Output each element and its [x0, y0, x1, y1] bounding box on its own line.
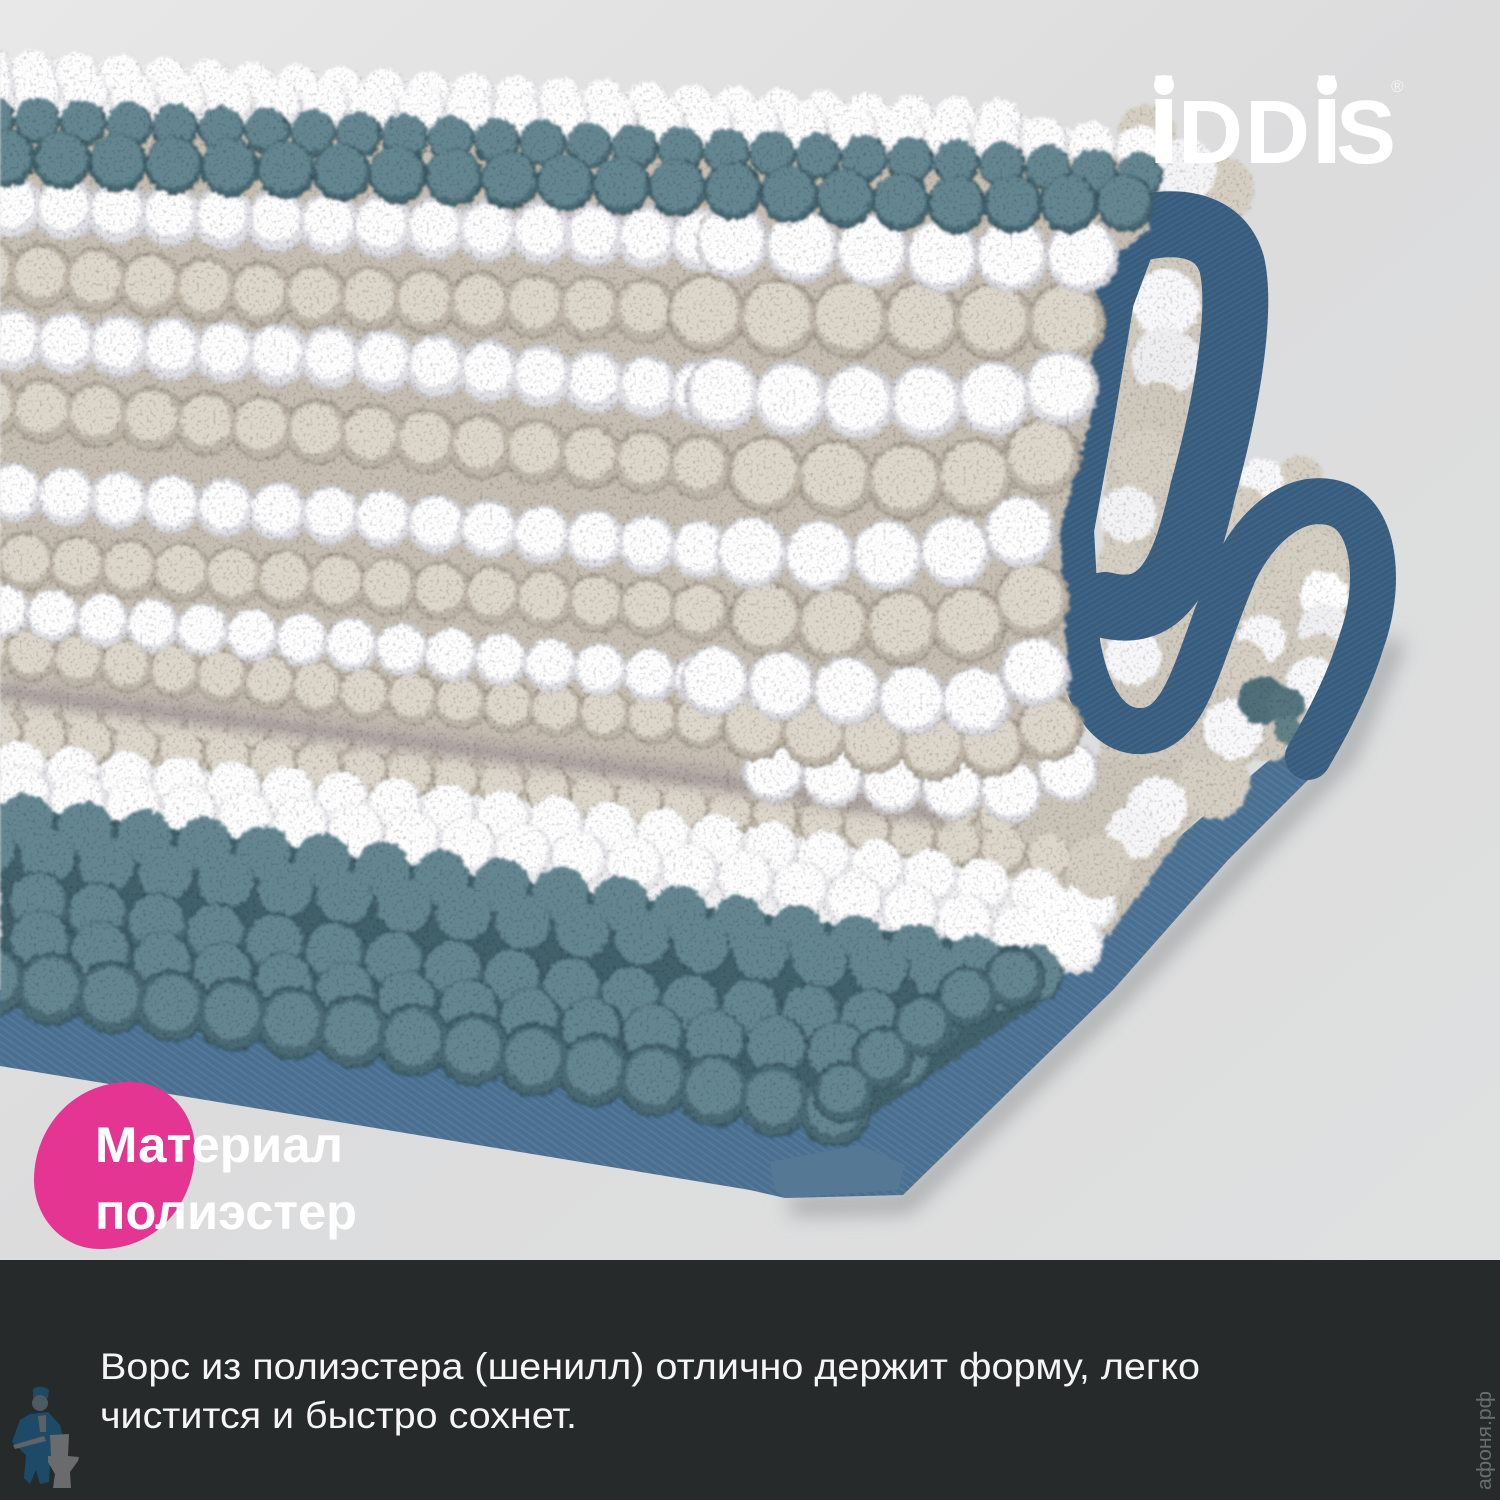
- teal rows: [0, 116, 1140, 176]
- description text: Ворс из полиэстера (шенилл) отлично держит форму, легко: [100, 1346, 1200, 1387]
- seam corner flap: [770, 1145, 905, 1198]
- icon: plumber with toilet: [12, 1387, 79, 1488]
- brand logo: i: [1310, 53, 1344, 189]
- brand logo: ®: [1391, 77, 1404, 96]
- white band base: [44, 760, 1015, 940]
- blue binding loop upper: [1105, 224, 1235, 608]
- floor shadow under mat edge: [790, 640, 1395, 1205]
- lower white rows: [0, 762, 1090, 905]
- blue binding side strip: [1072, 225, 1140, 640]
- heading: [95, 1117, 357, 1240]
- right part of lower mat bobbles: [1028, 747, 1250, 952]
- description text: чистится и быстро сохнет.: [100, 1395, 577, 1436]
- lower mat base: [0, 105, 1370, 1130]
- brand logo: DD: [1178, 83, 1310, 183]
- beige rows: [0, 267, 700, 313]
- top white rows: [0, 58, 1145, 170]
- brand logo: i: [1147, 53, 1181, 189]
- blue binding loop lower: [1075, 501, 1373, 757]
- upper roll pile rows: [0, 58, 1150, 815]
- teal band base: [0, 805, 1045, 1130]
- fold interior bobbles: [1098, 218, 1350, 763]
- brand logo: [1147, 53, 1404, 189]
- under-roll shadow: [0, 690, 950, 815]
- teal pile rows: [0, 814, 1035, 975]
- watermark: афоня.рф: [1474, 1391, 1496, 1490]
- photo: folded bath mat: [0, 58, 1395, 1205]
- description text: [100, 1346, 1200, 1436]
- dark bottom panel: [0, 1260, 1500, 1500]
- brand logo: S: [1336, 83, 1396, 183]
- white rows: [0, 605, 700, 680]
- heading: полиэстер: [95, 1184, 357, 1240]
- pink blob: [34, 1082, 195, 1249]
- heading: Материал: [95, 1117, 343, 1173]
- lower beige rows: [0, 697, 1000, 815]
- roll base: [0, 124, 1152, 773]
- front blue binding: [0, 750, 1338, 1198]
